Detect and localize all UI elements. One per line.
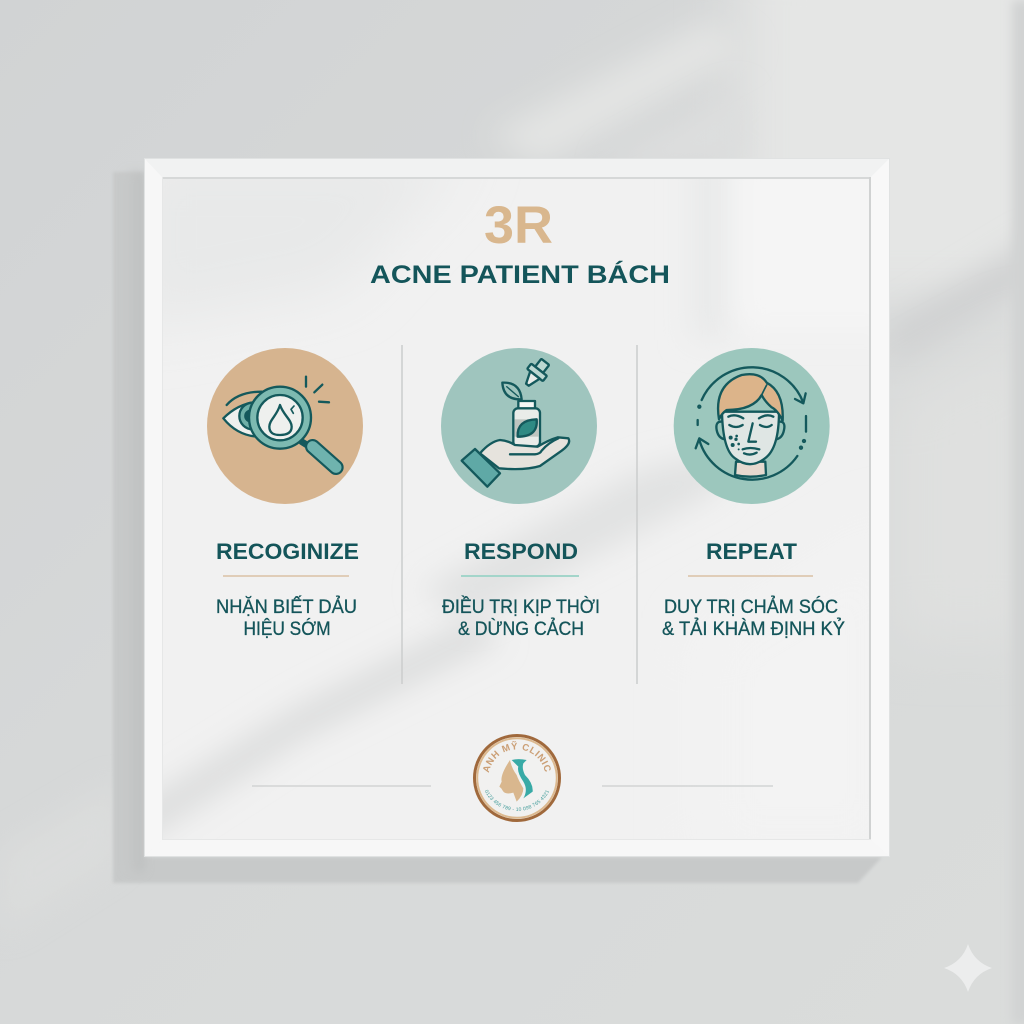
description: & TẢI KHÀM ĐỊNH KỶ	[662, 618, 845, 640]
column 1 text	[216, 539, 359, 640]
underline	[688, 575, 813, 577]
footer rules	[252, 785, 773, 787]
frame shadow	[113, 172, 882, 883]
description	[442, 596, 600, 640]
underline	[223, 575, 349, 577]
title: Acne Patient Bách: ACNE PATIENT BÁCH	[370, 260, 670, 289]
description	[662, 596, 845, 640]
logo: Anh My Clinic badge: ANH MỸ CLINIC	[483, 741, 551, 773]
title: 3R: 3R	[484, 196, 553, 255]
icon: face with repeating cycle arrows	[674, 348, 830, 504]
heading: Repeat: REPEAT	[706, 539, 798, 564]
description	[216, 596, 357, 640]
description: DUY TRỊ CHẢM SÓC	[664, 596, 838, 618]
underline	[461, 575, 579, 577]
poster frame	[144, 158, 890, 857]
description: HIỆU SỚM	[244, 618, 330, 640]
logo: Anh My Clinic badge: 0123 456 789 - 10 098 765 4321	[485, 790, 549, 811]
heading: Respond: RESPOND	[464, 539, 578, 564]
panel light and shadow	[162, 177, 871, 840]
icon: eye and magnifying glass	[207, 348, 363, 504]
icon: hand holding serum bottle	[441, 348, 597, 504]
column 2 text	[442, 539, 600, 640]
column dividers	[402, 345, 637, 684]
sparkle mark	[944, 944, 992, 992]
description: NHẶN BIẾT DẢU	[216, 596, 357, 618]
column 3 text	[662, 539, 845, 640]
heading: Recoginize: RECOGINIZE	[216, 539, 359, 564]
logo: Anh My Clinic badge	[473, 734, 561, 822]
description: ĐIỀU TRỊ KỊP THỜI	[442, 596, 600, 618]
description: & DỪNG CẢCH	[458, 618, 584, 640]
